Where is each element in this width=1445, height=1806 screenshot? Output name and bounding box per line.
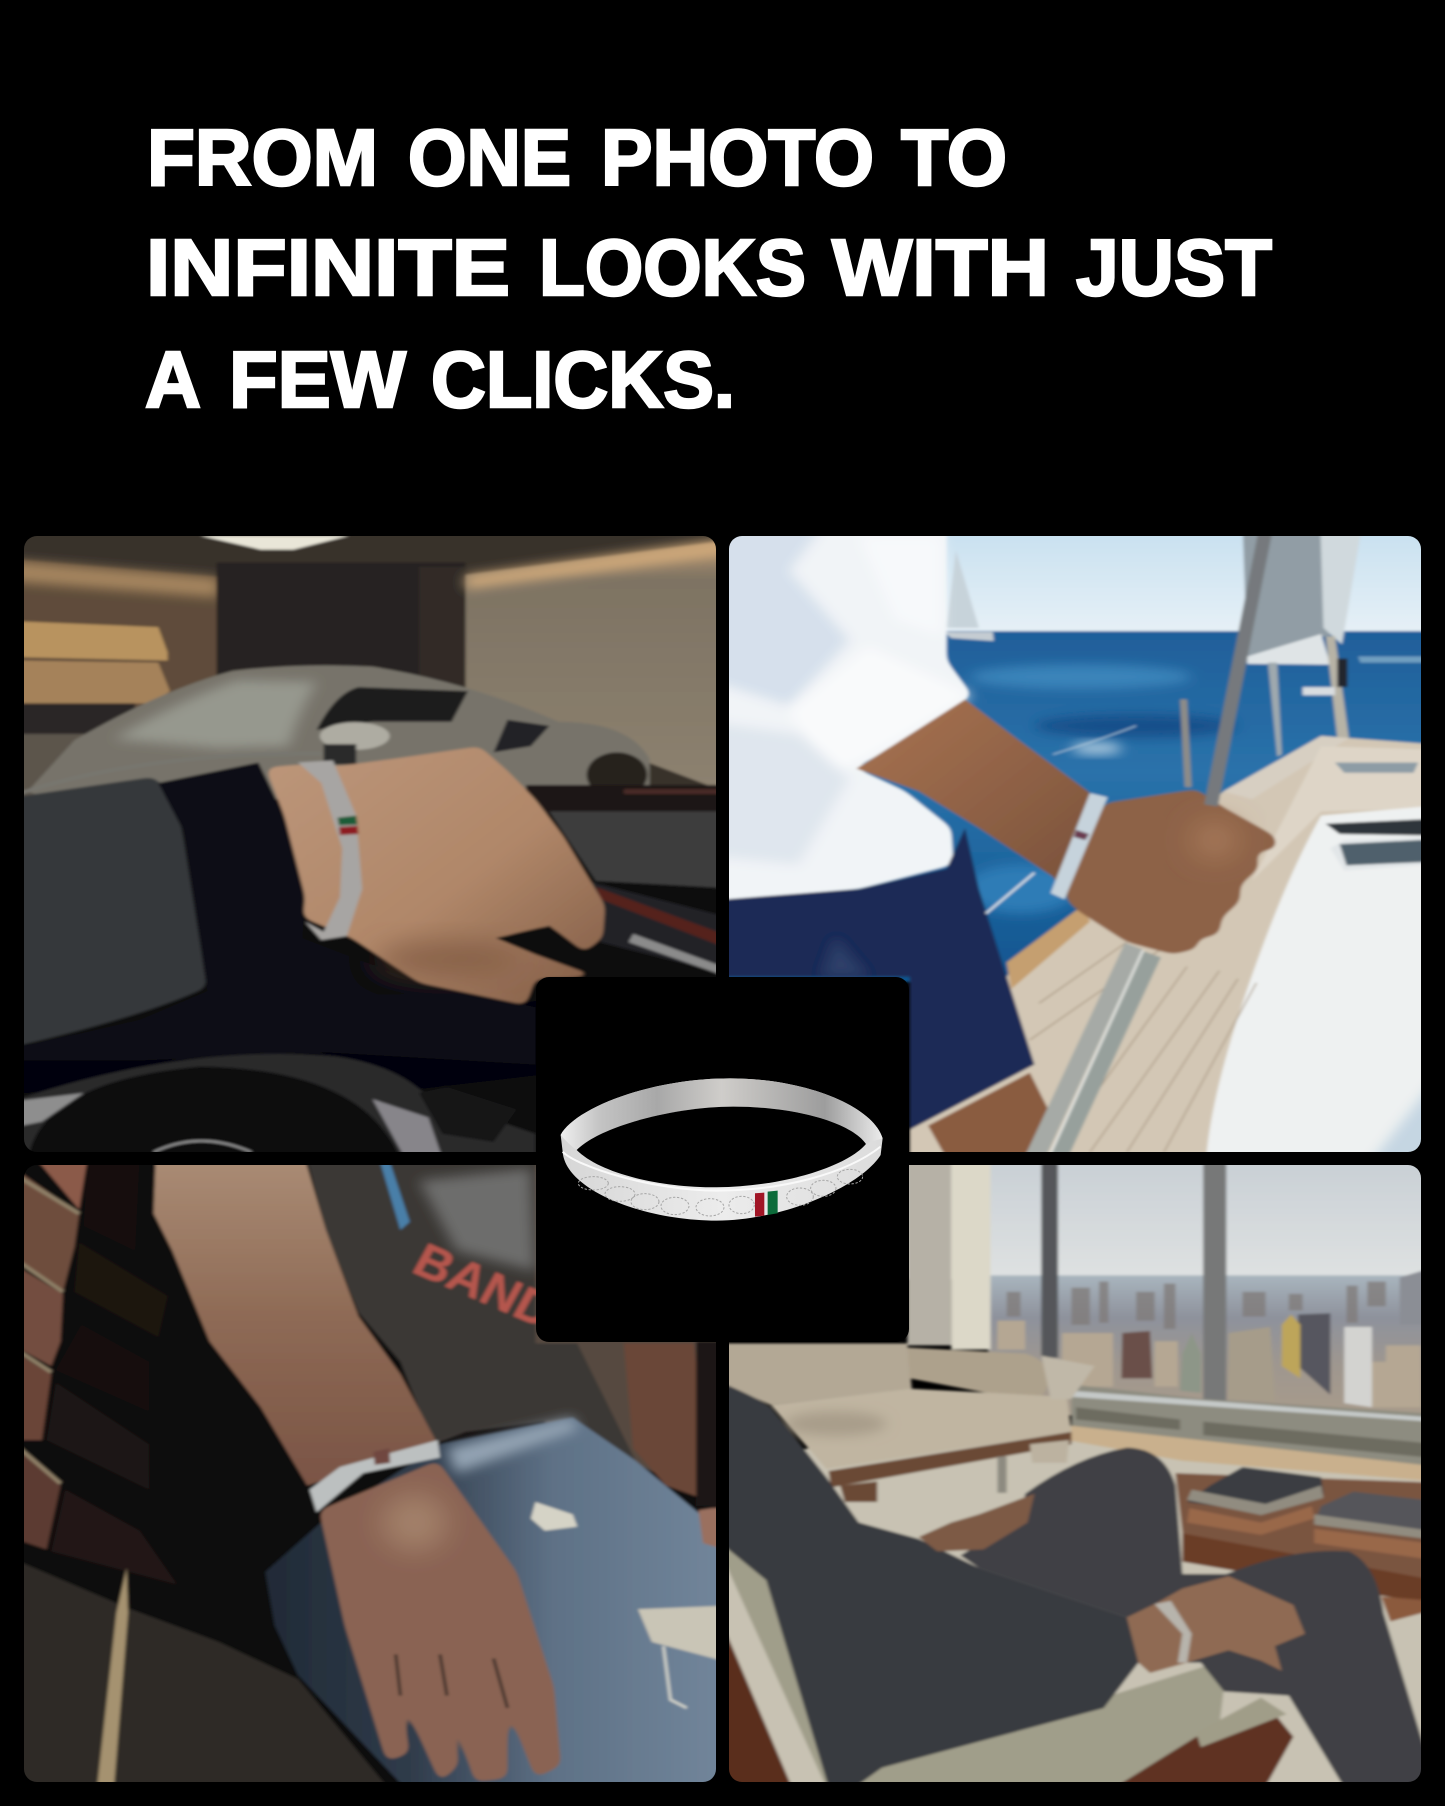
panel: centre product tile [536,977,909,1342]
panel: garage, hand on steering wheel [24,536,716,1152]
title: JUST [1076,223,1272,312]
panel: brick wall, arm and jeans [24,1165,716,1782]
icon: silver bangle product [561,1078,883,1221]
panel: sailboat, hand on rope [729,536,1421,1152]
title [145,113,1272,424]
panel: living room with city view [729,1165,1421,1782]
title: INFINITE [146,223,510,312]
title: CLICKS. [431,335,735,424]
title: LOOKS [539,223,806,312]
title: PHOTO [601,113,874,202]
title: FEW [229,335,406,424]
title: TO [901,113,1007,202]
title: FROM [147,113,378,202]
title: ONE [408,113,571,202]
panel: brick wall, arm and jeans: BAND [405,1232,565,1338]
title: WITH [832,223,1049,312]
title: A [145,335,201,424]
